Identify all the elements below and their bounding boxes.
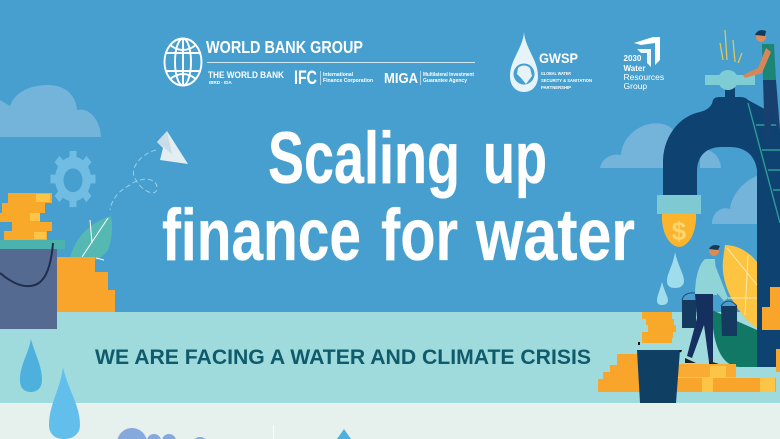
illustration: foreground bucket — [634, 342, 684, 403]
logo: GWSP: GLOBAL WATER — [541, 71, 572, 76]
logo: 2030 Water Resources Group: Water — [624, 64, 645, 73]
illustration: right clouds — [600, 123, 677, 168]
title: Scaling — [268, 118, 460, 199]
title: finance — [162, 195, 361, 276]
text: IFC: IFC — [294, 68, 317, 89]
icon: chevrons — [634, 37, 660, 65]
illustration: tap pipe — [657, 70, 780, 367]
logo: GWSP: PARTNERSHIP — [541, 85, 571, 90]
illustration: water drops right — [667, 252, 684, 288]
illustration: sparkle lines — [720, 30, 742, 63]
text: 2030 WRG: 2030 — [624, 54, 642, 63]
text: GWSP name: GWSP — [539, 50, 578, 66]
logo: 2030 Water Resources Group: Resources — [624, 72, 664, 82]
heading: World Bank Group: WORLD BANK GROUP — [206, 37, 363, 57]
dashed flight path — [110, 150, 157, 210]
buckets — [682, 300, 696, 328]
illustration: large leaf — [712, 245, 757, 367]
tap handle — [705, 75, 755, 85]
illustration: person on ladder — [743, 30, 780, 142]
illustration: left bucket — [0, 240, 65, 329]
illustration: ladder — [748, 103, 780, 223]
nozzle — [657, 195, 701, 214]
illustration: coin base — [598, 354, 776, 392]
logo: GWSP — [510, 32, 592, 92]
illustration: right stepped coins — [762, 287, 780, 330]
logo: GWSP: SECURITY & SANITATION — [541, 78, 592, 83]
title: water — [475, 195, 635, 276]
illustration: central coin stack — [642, 312, 676, 343]
illustration: left cloud — [0, 85, 101, 137]
logo: 2030 Water Resources Group: Group — [624, 81, 647, 91]
logo: World Bank Group: International — [323, 72, 354, 78]
text: MIGA: MIGA — [384, 70, 418, 87]
title: for — [381, 195, 458, 276]
logo: World Bank Group — [164, 37, 475, 89]
icon: paper plane — [110, 131, 188, 210]
illustration: water drops left — [20, 339, 42, 392]
logo: World Bank Group: IBRD · IDA — [209, 80, 232, 85]
logo: World Bank Group: Multilateral Investment — [423, 72, 474, 78]
title: up — [483, 118, 547, 199]
illustration: tap pipe: $ — [672, 216, 687, 246]
logo: World Bank Group: Finance Corporation — [323, 78, 373, 84]
subheading: WE ARE FACING A WATER AND CLIMATE CRISIS — [95, 345, 591, 369]
icon: gear — [50, 151, 96, 207]
illustration: left stepped coins — [55, 257, 115, 312]
illustration: person with buckets — [682, 245, 737, 364]
text: The World Bank: THE WORLD BANK — [208, 70, 284, 81]
title — [162, 118, 635, 276]
logo: World Bank Group: Guarantee Agency — [423, 78, 467, 84]
illustration: left coin stack — [0, 193, 52, 240]
logo: 2030 Water Resources Group — [624, 37, 664, 91]
icon: globe water drop — [510, 32, 538, 92]
icon: globe — [164, 38, 202, 86]
illustration: left leaf — [70, 216, 112, 263]
illustration: bottom chart fragments — [117, 425, 351, 439]
icon: dollar coin — [662, 214, 696, 247]
